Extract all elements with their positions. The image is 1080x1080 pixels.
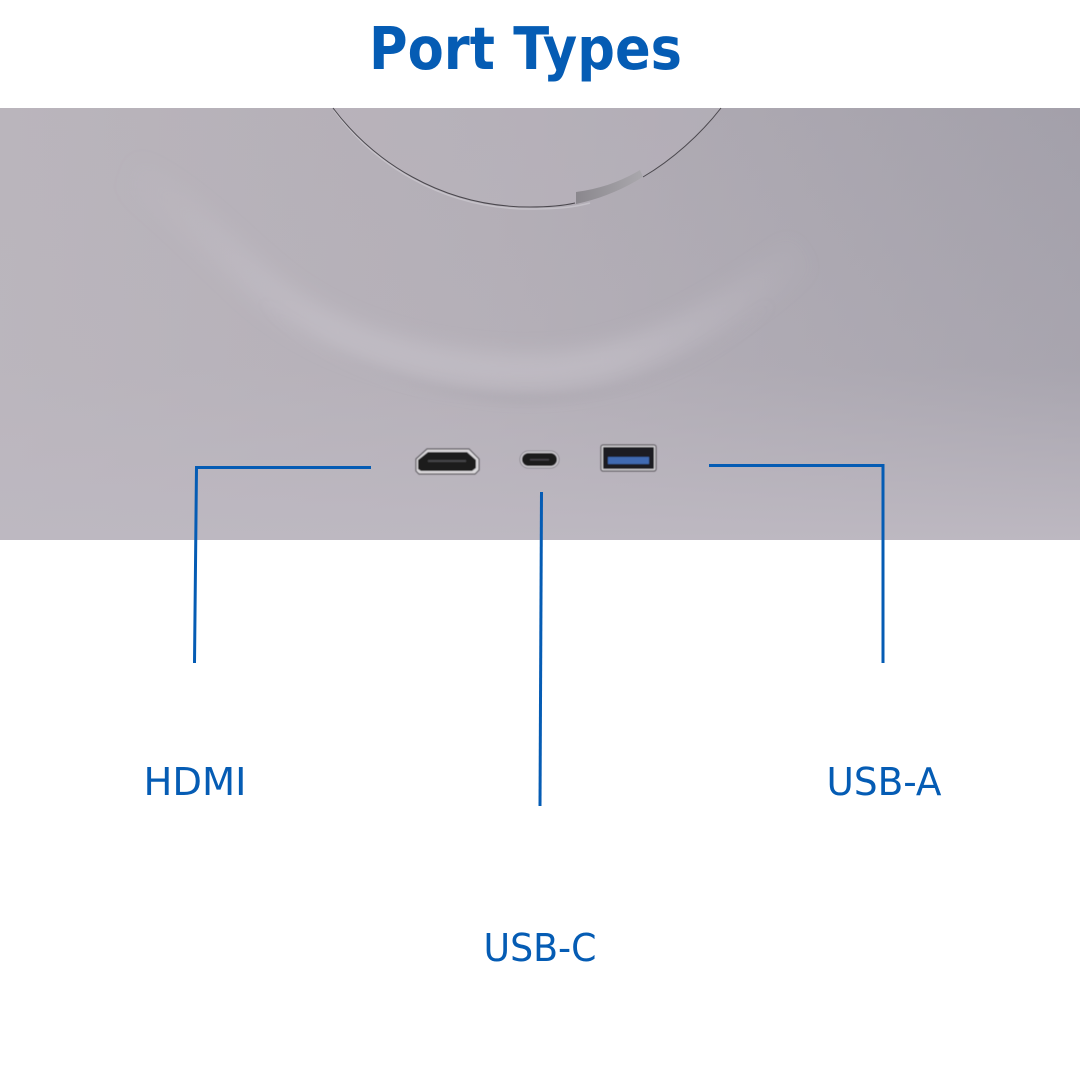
soft highlight ridge on monitor back (130, 175, 800, 370)
soft shadow under the ridge (260, 300, 770, 398)
title: Port Types (369, 14, 682, 83)
label: HDMI: HDMI (144, 760, 246, 804)
connector line: USB-C (540, 492, 542, 806)
label: USB-C: USB-C (484, 926, 596, 970)
label: USB-A: USB-A (826, 760, 942, 804)
port: USB-C (520, 451, 559, 468)
connector line: HDMI (194, 468, 371, 663)
product photo: monitor base and ports (0, 108, 1080, 540)
port: USB-A (601, 445, 656, 471)
stand base arc (333, 108, 721, 209)
connector line: USB-A (709, 466, 883, 663)
port: HDMI (416, 449, 479, 474)
